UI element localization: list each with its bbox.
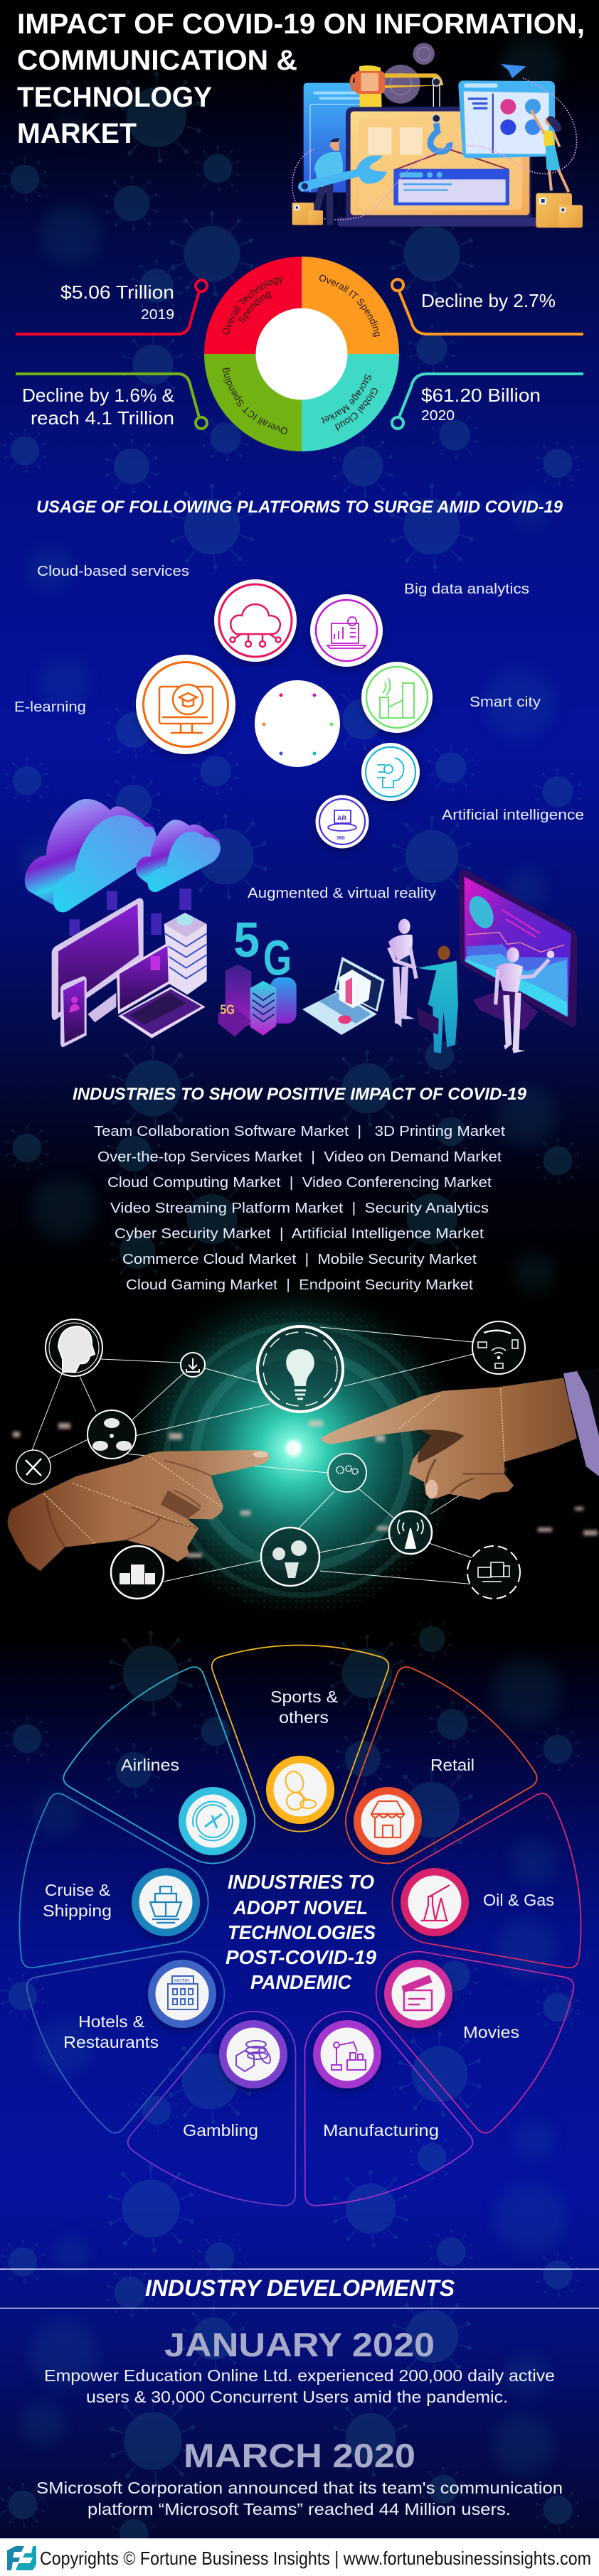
callout: Decline by 2.7%: Decline by 2.7% bbox=[421, 290, 556, 311]
5G sign bbox=[233, 912, 292, 986]
icon: gears circle bbox=[328, 1454, 366, 1492]
center white circle with dots bbox=[255, 680, 340, 767]
list: positive markets: Commerce Cloud Market | Mobile Security Market bbox=[122, 1252, 477, 1267]
donut chart bbox=[204, 257, 399, 451]
wheel center heading: TECHNOLOGIES bbox=[228, 1921, 376, 1943]
5G sign: G bbox=[263, 930, 292, 986]
segment outlines bbox=[9, 1645, 592, 2219]
segment labels: Restaurants bbox=[63, 2033, 159, 2051]
industry developments heading: INDUSTRY DEVELOPMENTS bbox=[145, 2275, 455, 2301]
platform labels: E-learning bbox=[14, 699, 86, 715]
shirt cuff bbox=[563, 1371, 599, 1476]
list: positive markets bbox=[94, 1124, 505, 1293]
segment labels: Movies bbox=[463, 2023, 519, 2041]
heading: platforms: USAGE OF FOLLOWING PLATFORMS TO SURGE AMID COVID-19 bbox=[36, 498, 563, 517]
donut labels: Global Cloud bbox=[334, 388, 378, 431]
icon: artificial intelligence bbox=[361, 743, 420, 801]
title: MARKET bbox=[17, 118, 137, 149]
callout: $5.06 Trillion bbox=[16, 280, 207, 334]
development: January 2020: Empower Education Online Ltd. experienced 200,000 daily active bbox=[44, 2366, 555, 2385]
development: March 2020: MARCH 2020 bbox=[184, 2437, 415, 2474]
laptop bbox=[338, 106, 537, 227]
icon: head with gears bbox=[46, 1319, 102, 1376]
phone bbox=[60, 976, 87, 1047]
segment labels bbox=[43, 1687, 554, 2140]
tech devices and clouds illustration bbox=[25, 799, 297, 1047]
icon: smart city bbox=[361, 662, 433, 733]
platform labels: Artificial intelligence bbox=[442, 807, 584, 823]
icon: tools bbox=[16, 1450, 51, 1484]
title: IMPACT OF COVID-19 ON INFORMATION, bbox=[17, 9, 585, 40]
wheel: industries to adopt bbox=[9, 1645, 592, 2219]
segment labels: Hotels & bbox=[78, 2012, 144, 2031]
server stack bbox=[164, 913, 207, 994]
logo bbox=[7, 2546, 36, 2570]
title: TECHNOLOGY bbox=[17, 82, 212, 113]
icon: connected devices bbox=[467, 1546, 520, 1599]
icon: big data analytics bbox=[310, 594, 383, 667]
icon: hotels: HOTEL bbox=[174, 1979, 191, 1984]
data streams bbox=[69, 889, 191, 936]
segment: Overall ICT Spending bbox=[204, 354, 302, 451]
donut labels: Overall IT Spending bbox=[319, 274, 380, 337]
development: January 2020: users & 30,000 Concurrent Users amid the pandemic. bbox=[86, 2388, 508, 2406]
icon: oil bbox=[401, 1868, 469, 1936]
donut labels bbox=[222, 274, 380, 434]
wheel center heading: PANDEMIC bbox=[250, 1971, 352, 1993]
robot shaking hands bbox=[388, 919, 416, 1027]
robot presenting bbox=[496, 948, 554, 1053]
big analytics screen bbox=[459, 869, 578, 1031]
5G sign: 5 bbox=[233, 912, 260, 967]
icon: download bbox=[181, 1353, 205, 1377]
robots and analytics screen illustration bbox=[302, 869, 578, 1053]
icon: gambling bbox=[219, 2020, 287, 2088]
segment labels: Retail bbox=[430, 1756, 475, 1774]
laptop bbox=[117, 943, 206, 1039]
segment: Overall IT Spending bbox=[302, 257, 399, 354]
callout: Decline by 1.6%: reach 4.1 Trillion bbox=[31, 407, 174, 429]
title bbox=[17, 9, 585, 149]
donut labels: Overall Technology bbox=[223, 276, 282, 335]
crane bbox=[351, 65, 443, 119]
laptop with books bbox=[302, 957, 385, 1035]
network lines bbox=[32, 1327, 484, 1585]
woman pointing bbox=[531, 110, 568, 192]
icon: gears bbox=[381, 43, 435, 104]
callout: $61.20 Billion bbox=[392, 374, 583, 429]
segment labels: others bbox=[279, 1708, 329, 1727]
development: March 2020: SMicrosoft Corporation announced that its team's communication bbox=[36, 2479, 563, 2497]
segment labels: Airlines bbox=[121, 1756, 179, 1774]
icon: light bulb bbox=[258, 1326, 343, 1412]
icon: e-learning bbox=[136, 655, 235, 754]
icon: sports bbox=[266, 1756, 334, 1824]
right hand bbox=[321, 1378, 577, 1500]
businessman bbox=[417, 946, 458, 1053]
list: positive markets: Cloud Gaming Market | Endpoint Security Market bbox=[126, 1277, 473, 1293]
wheel center heading: ADOPT NOVEL bbox=[233, 1896, 368, 1918]
development: January 2020: JANUARY 2020 bbox=[164, 2326, 435, 2363]
icon: retail bbox=[354, 1787, 422, 1855]
photo: hands and network bbox=[0, 1279, 599, 1621]
icon: cloud services bbox=[214, 579, 297, 662]
list: positive markets: Cloud Computing Market | Video Conferencing Market bbox=[107, 1175, 492, 1191]
wheel center heading: INDUSTRIES TO bbox=[228, 1871, 374, 1893]
segment labels: Shipping bbox=[43, 1901, 112, 1920]
right window bbox=[458, 80, 555, 159]
segment labels: Oil & Gas bbox=[483, 1891, 554, 1909]
icon: clouds bbox=[88, 1410, 136, 1459]
monitor bbox=[52, 898, 144, 1022]
list: positive markets: Team Collaboration Software Market | 3D Printing Market bbox=[94, 1124, 505, 1139]
paper plane bbox=[501, 64, 526, 78]
man with wrench bbox=[298, 138, 387, 225]
icon: gear bulb bbox=[261, 1528, 319, 1586]
city bokeh bbox=[13, 1420, 598, 1557]
icon: airlines bbox=[179, 1787, 247, 1855]
callout: $5.06 Trillion: $5.06 Trillion bbox=[60, 281, 174, 303]
title: COMMUNICATION & bbox=[17, 45, 297, 76]
icon: antenna bbox=[389, 1511, 432, 1554]
platform labels: Big data analytics bbox=[404, 581, 529, 597]
5G buildings bbox=[218, 965, 297, 1036]
wheel center heading bbox=[226, 1871, 376, 1993]
small 3D cloud bbox=[136, 820, 221, 892]
dotted paths bbox=[292, 78, 577, 220]
segment labels: Gambling bbox=[183, 2121, 258, 2140]
sleeve bbox=[577, 1368, 599, 1436]
donut labels: Storage Market bbox=[321, 374, 371, 424]
list: positive markets: Cyber Security Market | Artificial Intelligence Market bbox=[115, 1226, 484, 1242]
callout: $5.06 Trillion: 2019 bbox=[141, 307, 174, 323]
icon: buildings bbox=[111, 1546, 164, 1599]
icon: augmented reality: AR bbox=[337, 815, 346, 822]
callout: Decline by 2.7% bbox=[392, 279, 583, 334]
callout: Decline by 1.6% bbox=[16, 374, 207, 429]
callout: Decline by 1.6%: Decline by 1.6% & bbox=[22, 385, 174, 406]
icon: augmented reality: 360 bbox=[336, 836, 345, 841]
donut white center bbox=[256, 308, 347, 399]
segment labels: Sports & bbox=[270, 1687, 338, 1706]
segment: Overall Technology Spending bbox=[204, 257, 302, 354]
development: March 2020: platform “Microsoft Teams” reached 44 Million users. bbox=[88, 2500, 511, 2518]
blue window bbox=[304, 83, 363, 193]
segment labels: Cruise & bbox=[45, 1881, 110, 1899]
crane hook bbox=[430, 114, 450, 151]
icon: augmented reality bbox=[316, 795, 369, 849]
hero illustration: crane and laptop bbox=[292, 43, 583, 227]
wheel center heading: POST-COVID-19 bbox=[226, 1946, 376, 1968]
icon: hotels bbox=[148, 1960, 216, 2028]
platform labels: Smart city bbox=[470, 694, 541, 710]
segment labels: Manufacturing bbox=[323, 2121, 439, 2140]
donut labels: Overall ICT Spending bbox=[222, 368, 287, 434]
list: positive markets: Video Streaming Platform Market | Security Analytics bbox=[110, 1201, 489, 1216]
development: January 2020 bbox=[44, 2326, 555, 2406]
icon: manufacturing bbox=[313, 2020, 381, 2088]
large 3D cloud bbox=[25, 799, 157, 912]
platform labels: Cloud-based services bbox=[37, 564, 189, 579]
list: positive markets: Over-the-top Services Market | Video on Demand Market bbox=[97, 1149, 502, 1165]
callout: $61.20 Billion: $61.20 Billion bbox=[421, 385, 541, 406]
glow and globe bbox=[123, 1279, 465, 1620]
platform labels: Augmented & virtual reality bbox=[248, 886, 436, 901]
icon: movies bbox=[384, 1960, 452, 2028]
footer bbox=[0, 2538, 599, 2576]
boxes bbox=[292, 193, 583, 227]
platform labels bbox=[14, 564, 584, 901]
donut labels: Spending bbox=[238, 291, 272, 323]
segment: Global Cloud Storage Market bbox=[302, 354, 399, 451]
icon: cruise bbox=[132, 1868, 200, 1936]
callout: $61.20 Billion: 2020 bbox=[421, 408, 455, 424]
development: March 2020 bbox=[36, 2437, 563, 2518]
5G buildings: 5G bbox=[220, 1002, 235, 1017]
left hand bbox=[8, 1450, 270, 1571]
icon: wifi devices bbox=[472, 1321, 525, 1374]
heading: positive impact: INDUSTRIES TO SHOW POSITIVE IMPACT OF COVID-19 bbox=[73, 1085, 527, 1104]
photo bottom fade bbox=[0, 1599, 599, 1621]
